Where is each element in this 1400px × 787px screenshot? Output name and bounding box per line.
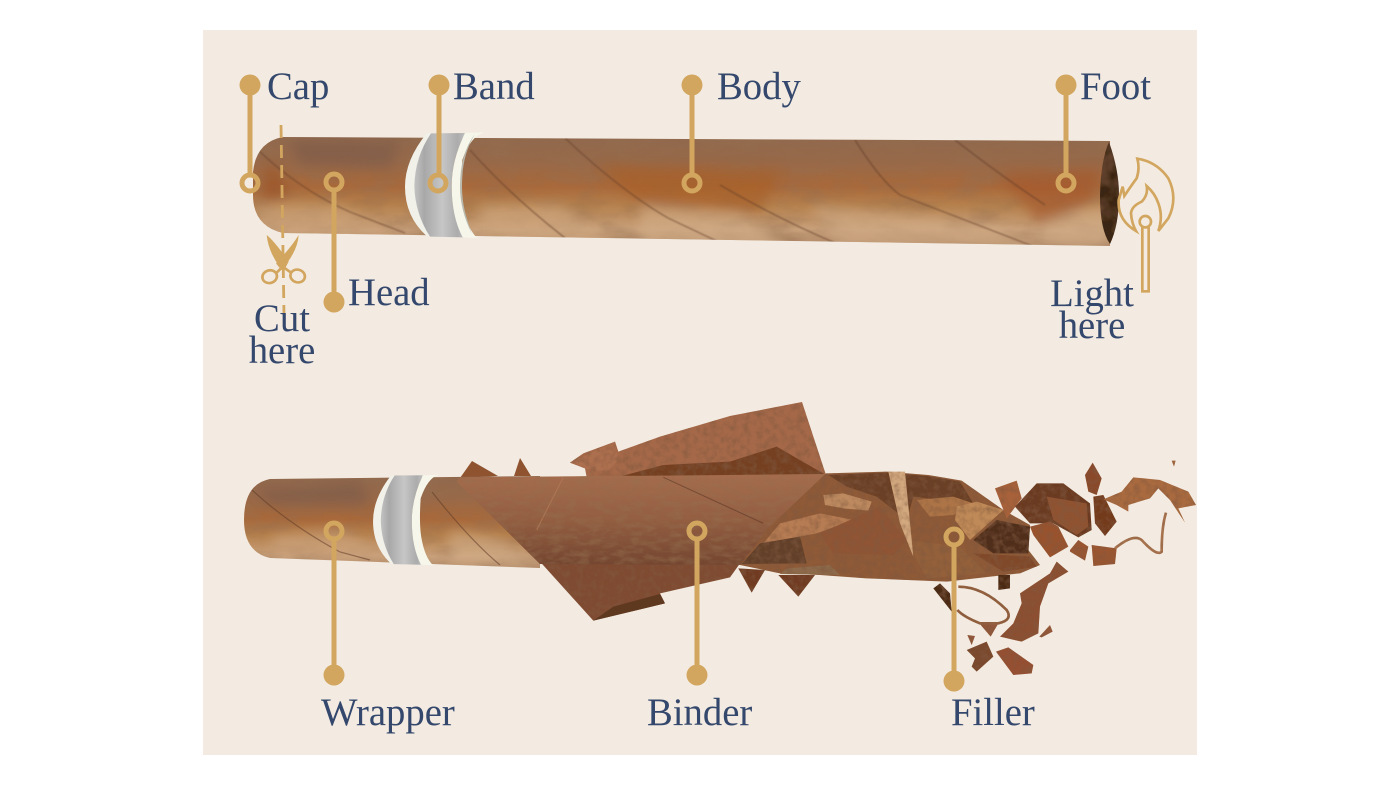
- wrapper band: [373, 475, 439, 565]
- intact cigar: [250, 132, 1120, 250]
- label: Foot: Foot: [1080, 66, 1151, 108]
- cigar foot: [1100, 142, 1119, 244]
- label: Body: [682, 66, 801, 191]
- cigar band: [405, 132, 484, 238]
- label: Head: [324, 174, 430, 314]
- background panel: [203, 30, 1197, 755]
- label: Band: Band: [453, 66, 535, 108]
- label: Foot: [1056, 66, 1151, 191]
- wrapper section: [240, 474, 540, 574]
- text: light here: Light: [1050, 273, 1134, 315]
- label: Filler: Filler: [951, 692, 1035, 734]
- loose leaf fragments: [460, 458, 531, 478]
- text: cut here: here: [249, 330, 315, 372]
- icon: lit match: [1119, 159, 1173, 291]
- label: Wrapper: Wrapper: [321, 692, 455, 734]
- icon: scissors: [261, 235, 306, 285]
- label: Binder: [647, 523, 752, 734]
- label: Band: [428, 66, 535, 191]
- label: Filler: [944, 529, 1035, 734]
- filler tobacco: [738, 461, 1196, 675]
- label: Head: Head: [348, 272, 430, 314]
- binder section: [457, 474, 826, 621]
- upper binder flap: [570, 402, 826, 477]
- label: Binder: Binder: [647, 692, 752, 734]
- text: cut here: Cut: [254, 298, 310, 340]
- label: Cap: [240, 66, 329, 191]
- label: Body: Body: [717, 66, 801, 108]
- cut line: [281, 125, 284, 315]
- label: Wrapper: [321, 523, 455, 734]
- text: light here: here: [1059, 305, 1125, 347]
- label: Cap: Cap: [267, 66, 329, 108]
- unwrapped cigar: [240, 402, 1196, 675]
